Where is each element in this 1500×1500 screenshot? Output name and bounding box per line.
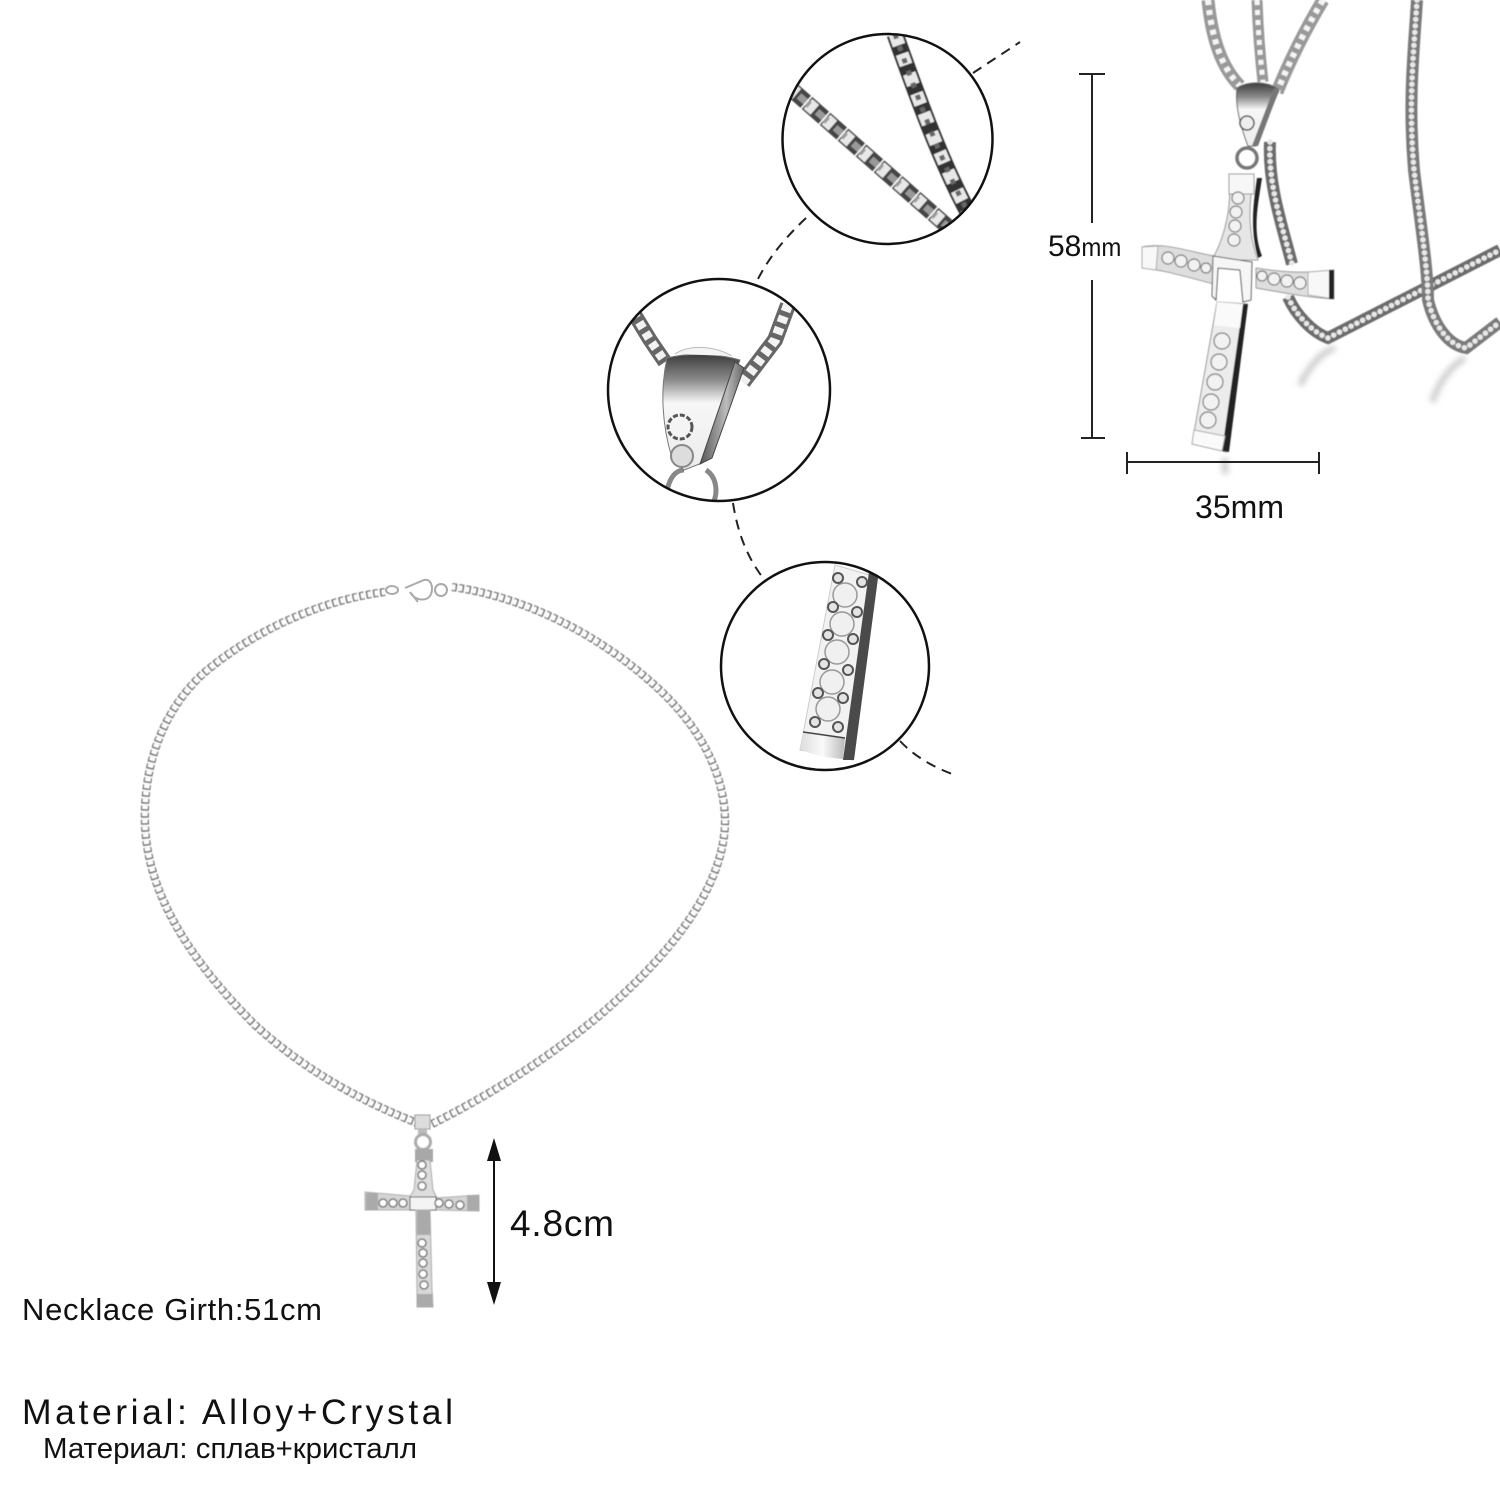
label: pendant height: 4.8cm xyxy=(510,1203,614,1244)
detail circle: crystal shaft xyxy=(721,562,929,770)
full necklace chain xyxy=(145,587,725,1124)
detail circle: pendant bail xyxy=(608,279,830,505)
dashed connector lines xyxy=(733,42,1020,775)
dimension: height bracket xyxy=(1079,74,1105,438)
dimension: width bracket xyxy=(1127,452,1319,474)
small cross pendant xyxy=(365,1115,479,1307)
necklace clasp xyxy=(386,580,447,602)
product photo: chains on the right xyxy=(1208,0,1500,474)
product photo: large cross pendant xyxy=(1142,83,1334,452)
detail circle: chain links xyxy=(782,34,992,244)
label: material Russian: Материал: сплав+кристалл xyxy=(43,1433,417,1465)
arrow: pendant height xyxy=(487,1138,501,1305)
label: 58mm: 58mm xyxy=(1048,230,1121,263)
label: material English: Material: Alloy+Crystal xyxy=(22,1392,453,1432)
label: necklace girth: Necklace Girth:51cm xyxy=(22,1292,322,1327)
label: 35mm: 35mm xyxy=(1195,489,1284,525)
